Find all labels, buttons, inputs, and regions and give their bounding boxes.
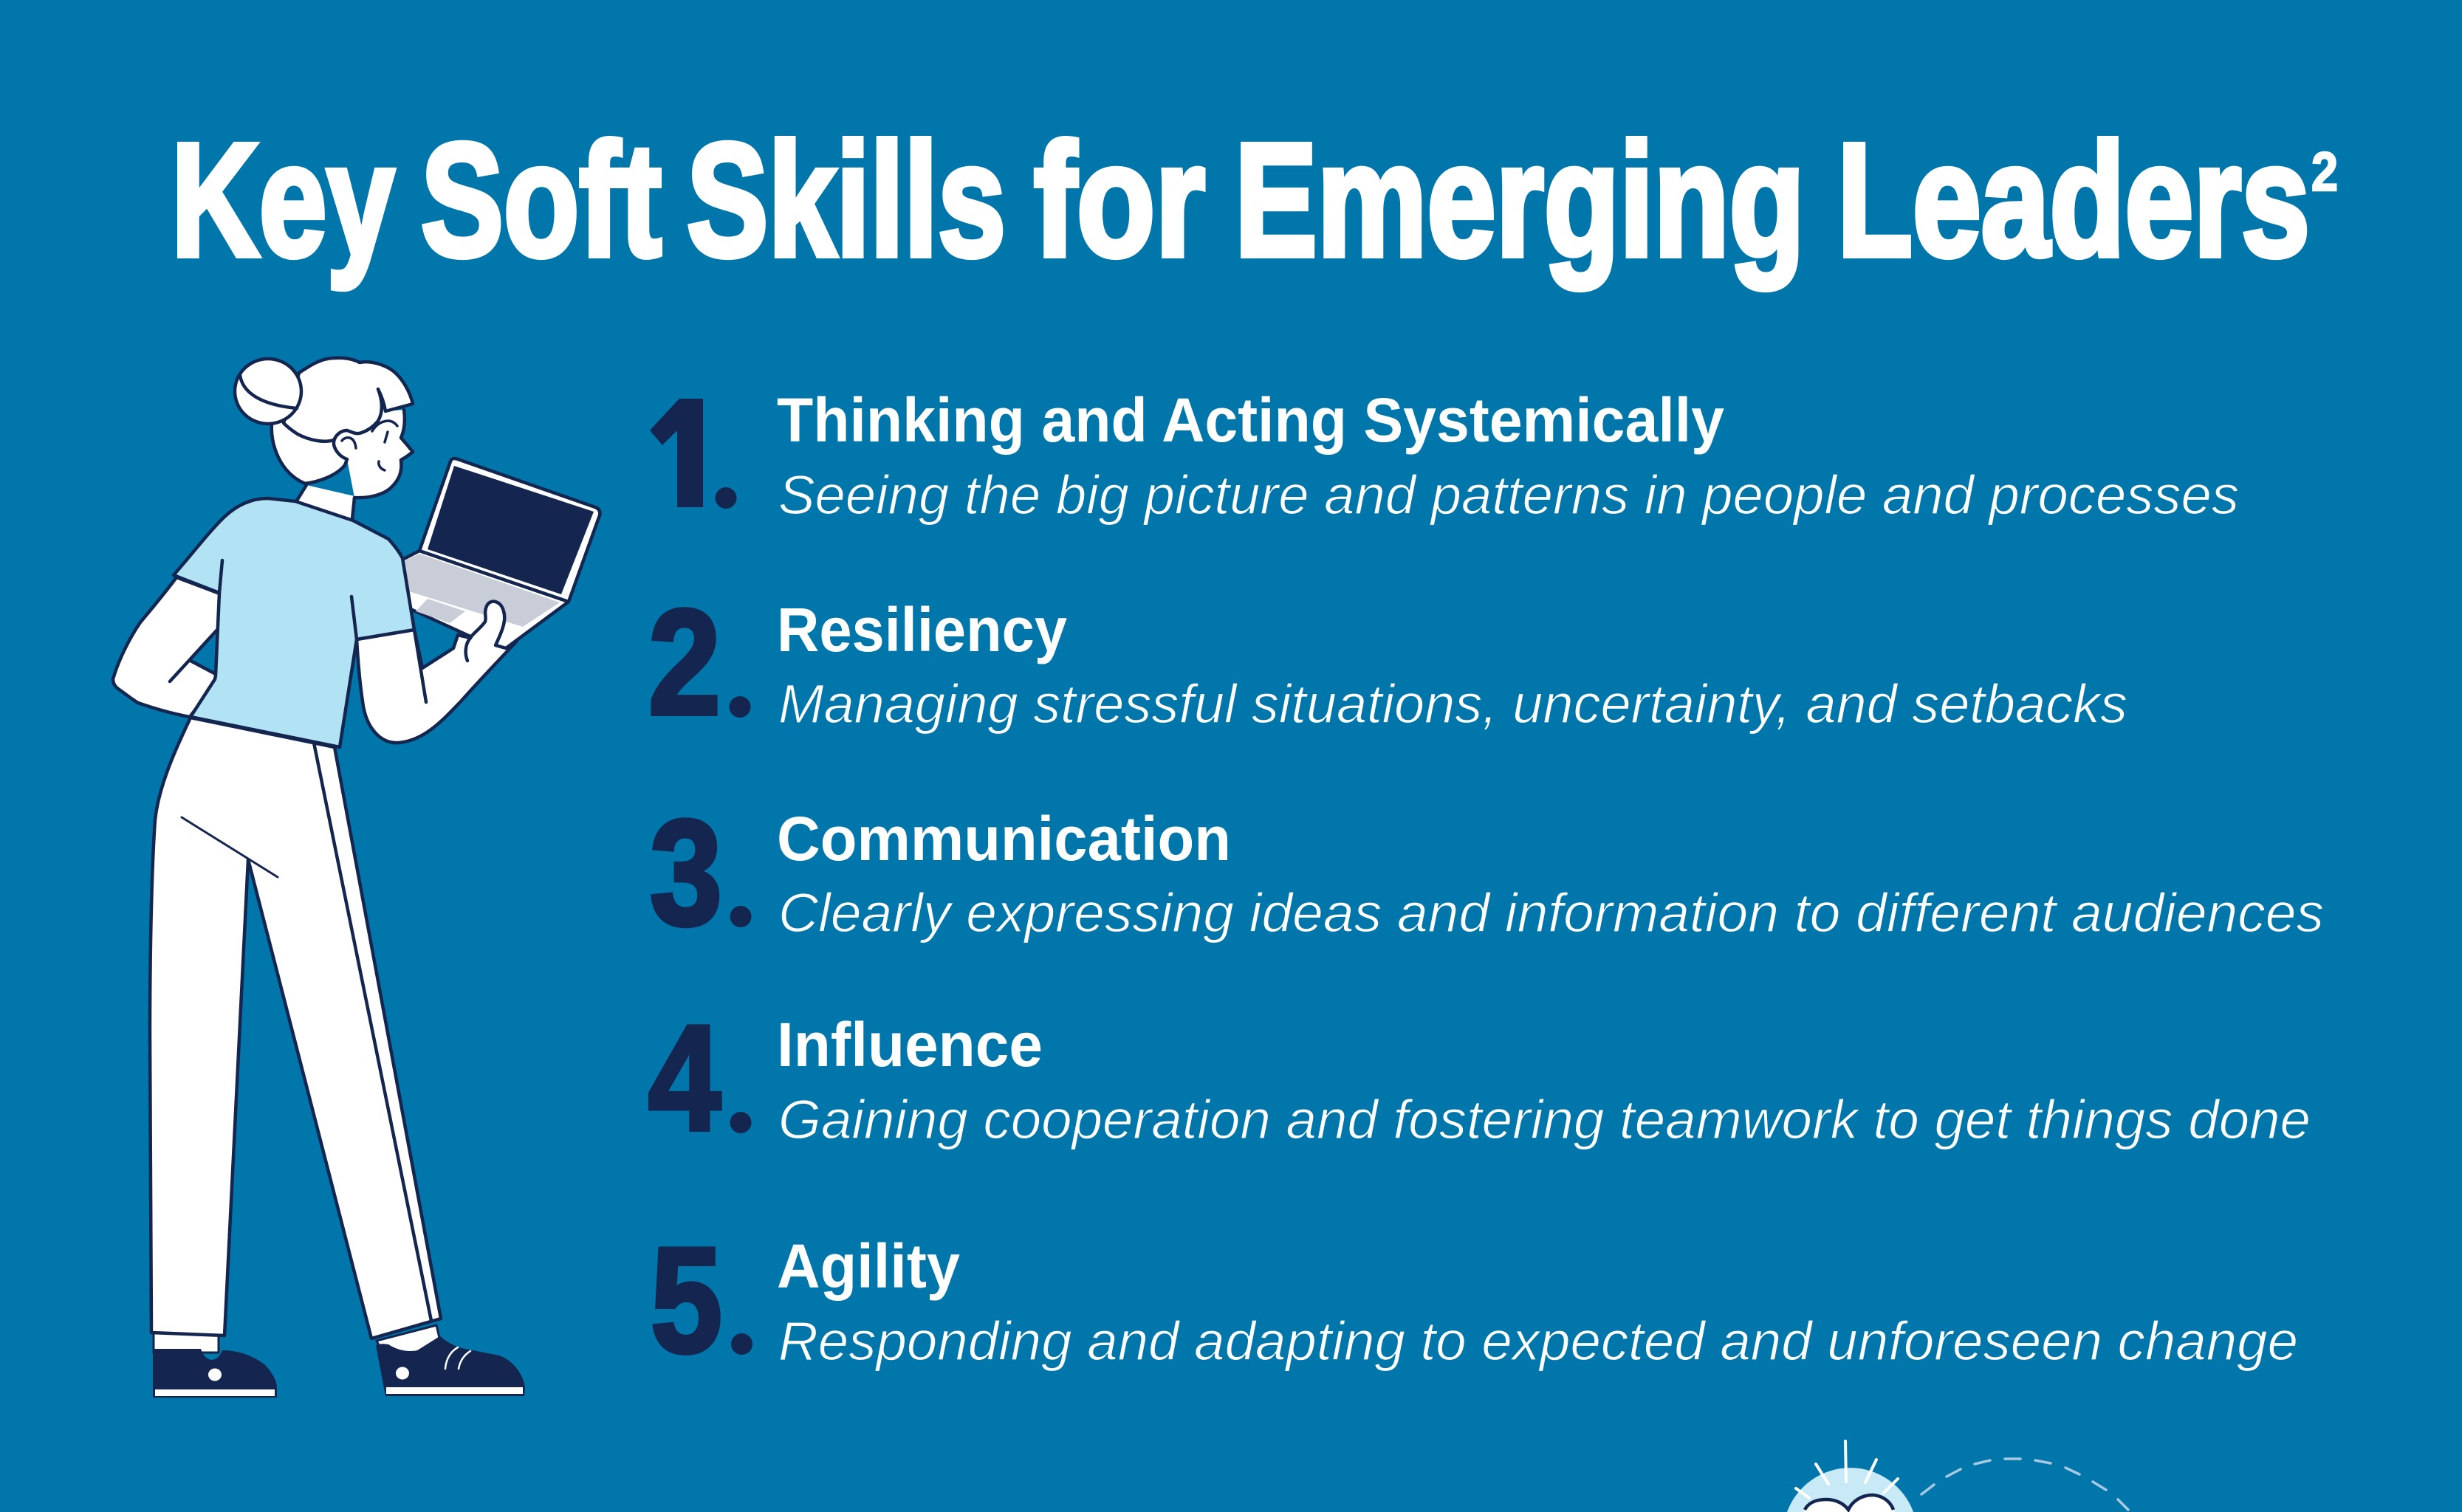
title (171, 111, 2338, 290)
description 1: Seeing the big picture and patterns in people and processes (778, 464, 2239, 526)
hair (284, 358, 413, 459)
neck (295, 485, 354, 523)
title: Skills (687, 111, 1006, 290)
right foot shoe (376, 1325, 525, 1396)
number 3: 3 (650, 789, 722, 957)
left arm on hip (113, 577, 222, 717)
dashed arc arrow (1921, 1459, 2128, 1510)
title: Emerging (1235, 111, 1805, 290)
title: for (1034, 111, 1205, 290)
skill 2 (648, 579, 2127, 746)
title: 2 (2311, 141, 2338, 202)
head and face (272, 389, 413, 498)
right arm and hand (357, 602, 517, 743)
title: Soft (421, 111, 662, 290)
trousers (150, 718, 441, 1339)
skill 3 (650, 789, 2324, 957)
number 1 (650, 399, 737, 509)
icon: glowing brain bulb cropped at bottom edge (1787, 1441, 1913, 1512)
skill 4 (648, 994, 2311, 1162)
t-shirt (174, 498, 414, 747)
heading 5: Agility (777, 1231, 960, 1301)
number 1: 1 (645, 370, 719, 537)
illustration: woman holding a laptop (113, 358, 600, 1398)
number 2: 2 (648, 579, 721, 746)
laptop (402, 458, 600, 648)
skill 5 (651, 1217, 2298, 1384)
description 4: Gaining cooperation and fostering teamwork to get things done (778, 1089, 2311, 1150)
left foot shoe (153, 1329, 277, 1398)
number 4: 4 (648, 994, 721, 1162)
heading 3: Communication (777, 804, 1231, 873)
number 5: 5 (651, 1217, 722, 1384)
description 3: Clearly expressing ideas and information to different audiences (778, 882, 2324, 944)
hair bun (235, 359, 301, 424)
heading 1: Thinking and Acting Systemically (777, 385, 1724, 455)
description 5: Responding and adapting to expected and unforeseen change (778, 1310, 2298, 1372)
skill 1 (650, 396, 2238, 525)
title: Key (171, 111, 394, 290)
heading 2: Resiliency (777, 595, 1067, 664)
title: Leaders (1837, 111, 2310, 290)
description 2: Managing stressful situations, uncertainty, and setbacks (778, 673, 2127, 735)
heading 4: Influence (777, 1010, 1043, 1079)
